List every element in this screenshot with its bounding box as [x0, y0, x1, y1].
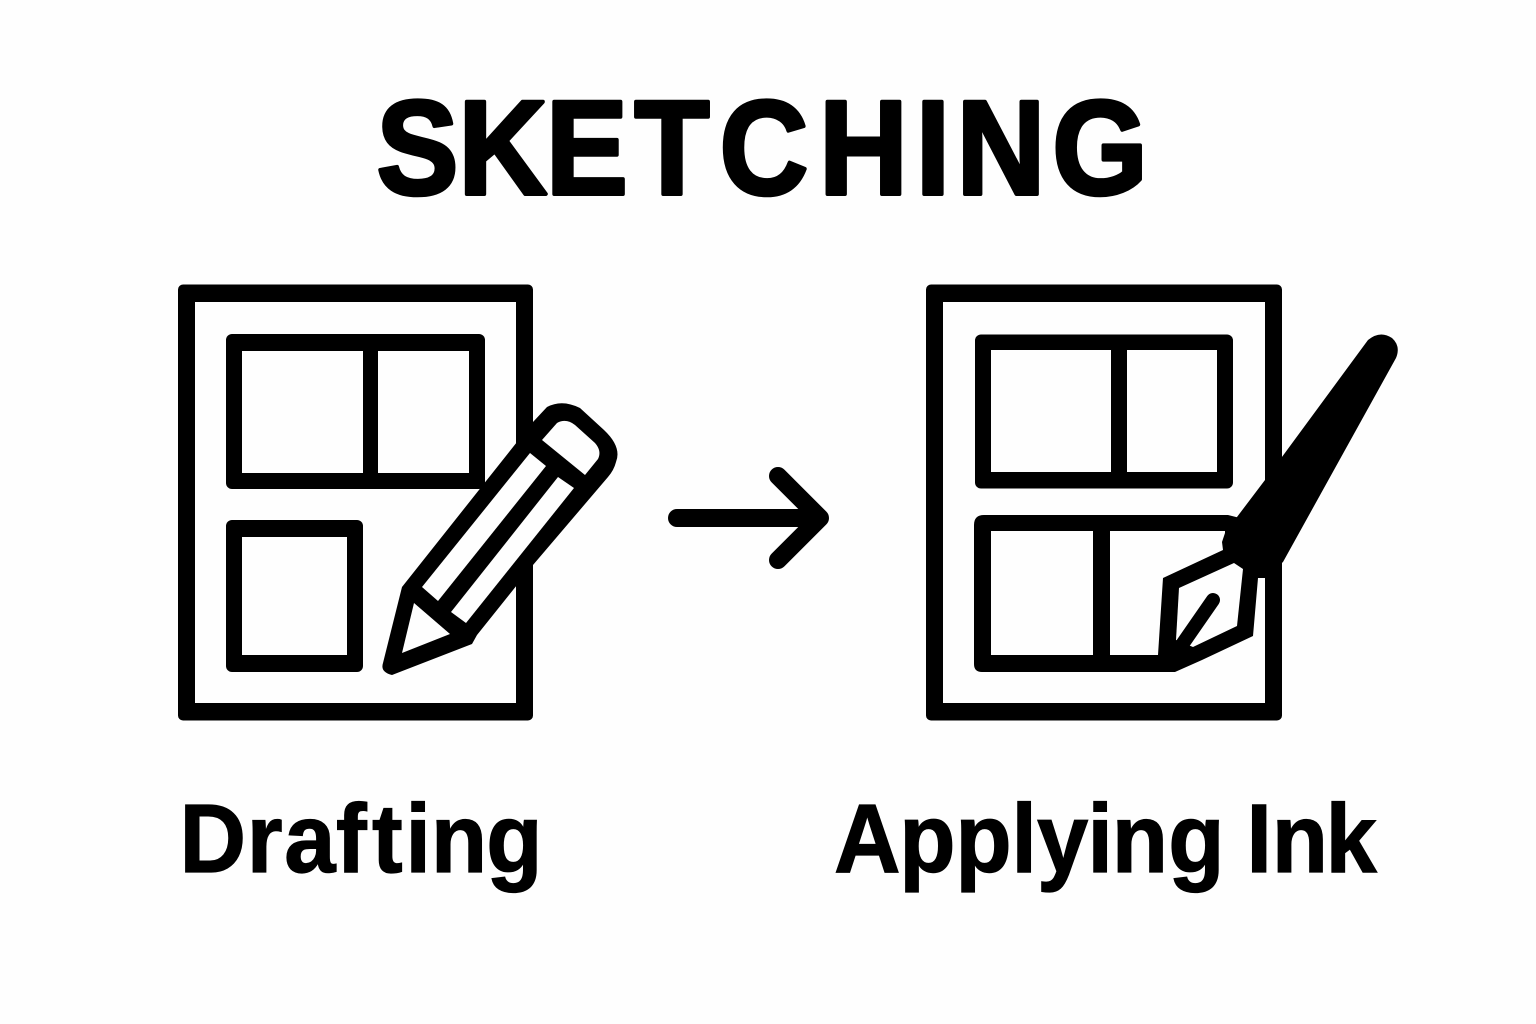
label: drafting: Drafting	[179, 785, 543, 894]
icon: ink pen	[1158, 334, 1398, 672]
panel: drafting	[178, 284, 618, 720]
top comic panel: drafting	[226, 334, 485, 489]
arrow	[677, 476, 820, 560]
page outline: inking	[926, 284, 1282, 720]
lower comic panel: drafting	[226, 520, 363, 672]
panel: applying ink	[926, 284, 1398, 720]
label: applying ink: Applying Ink	[834, 785, 1377, 894]
icon: pencil	[382, 403, 618, 675]
top comic panel: inking	[975, 334, 1233, 488]
lower comic panel: inking	[974, 515, 1240, 672]
title: SKETCHING	[377, 74, 1148, 223]
page outline: drafting	[178, 284, 533, 720]
